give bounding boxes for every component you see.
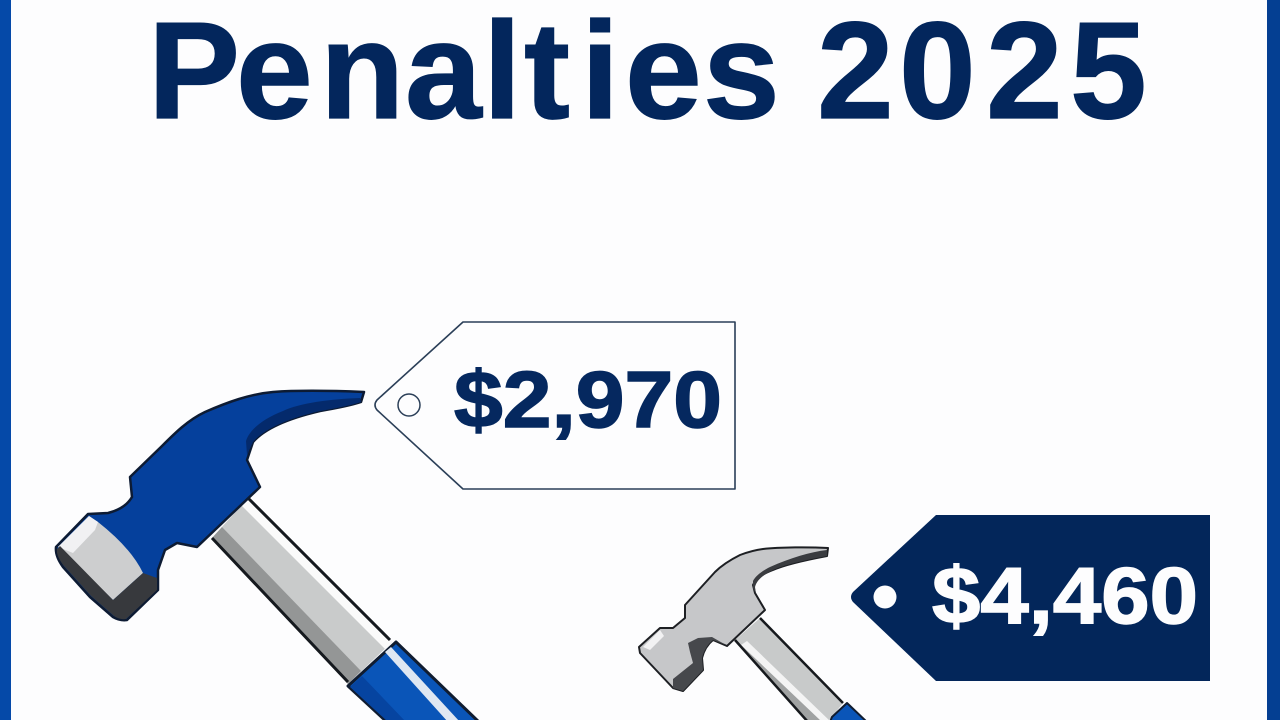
tag hole — [874, 586, 896, 608]
large hammer handle: blue grip — [348, 642, 480, 720]
tag body — [851, 515, 1210, 681]
small hammer handle: blue grip — [830, 703, 868, 720]
icon: large blue hammer — [56, 391, 480, 720]
price tag: $2,970 — [375, 322, 735, 489]
right border bar — [1267, 0, 1280, 720]
small hammer handle: silver shaft — [735, 618, 843, 720]
tag outline — [375, 322, 735, 489]
tag hole — [398, 394, 420, 416]
small face highlight — [643, 630, 664, 650]
small claw shadow — [753, 550, 827, 594]
small neck shadow — [673, 637, 726, 691]
price tag: $4,460 — [851, 515, 1210, 681]
claw shadow — [246, 398, 361, 455]
large hammer handle: silver shaft — [212, 498, 392, 684]
tag amount: $4,460 — [932, 551, 1198, 640]
left border bar — [0, 0, 11, 720]
icon: small silver hammer — [639, 547, 868, 720]
large hammer head — [56, 391, 364, 620]
small hammer head — [639, 547, 828, 691]
tag amount: $2,970 — [454, 355, 722, 444]
large hammer striking face — [57, 516, 157, 619]
